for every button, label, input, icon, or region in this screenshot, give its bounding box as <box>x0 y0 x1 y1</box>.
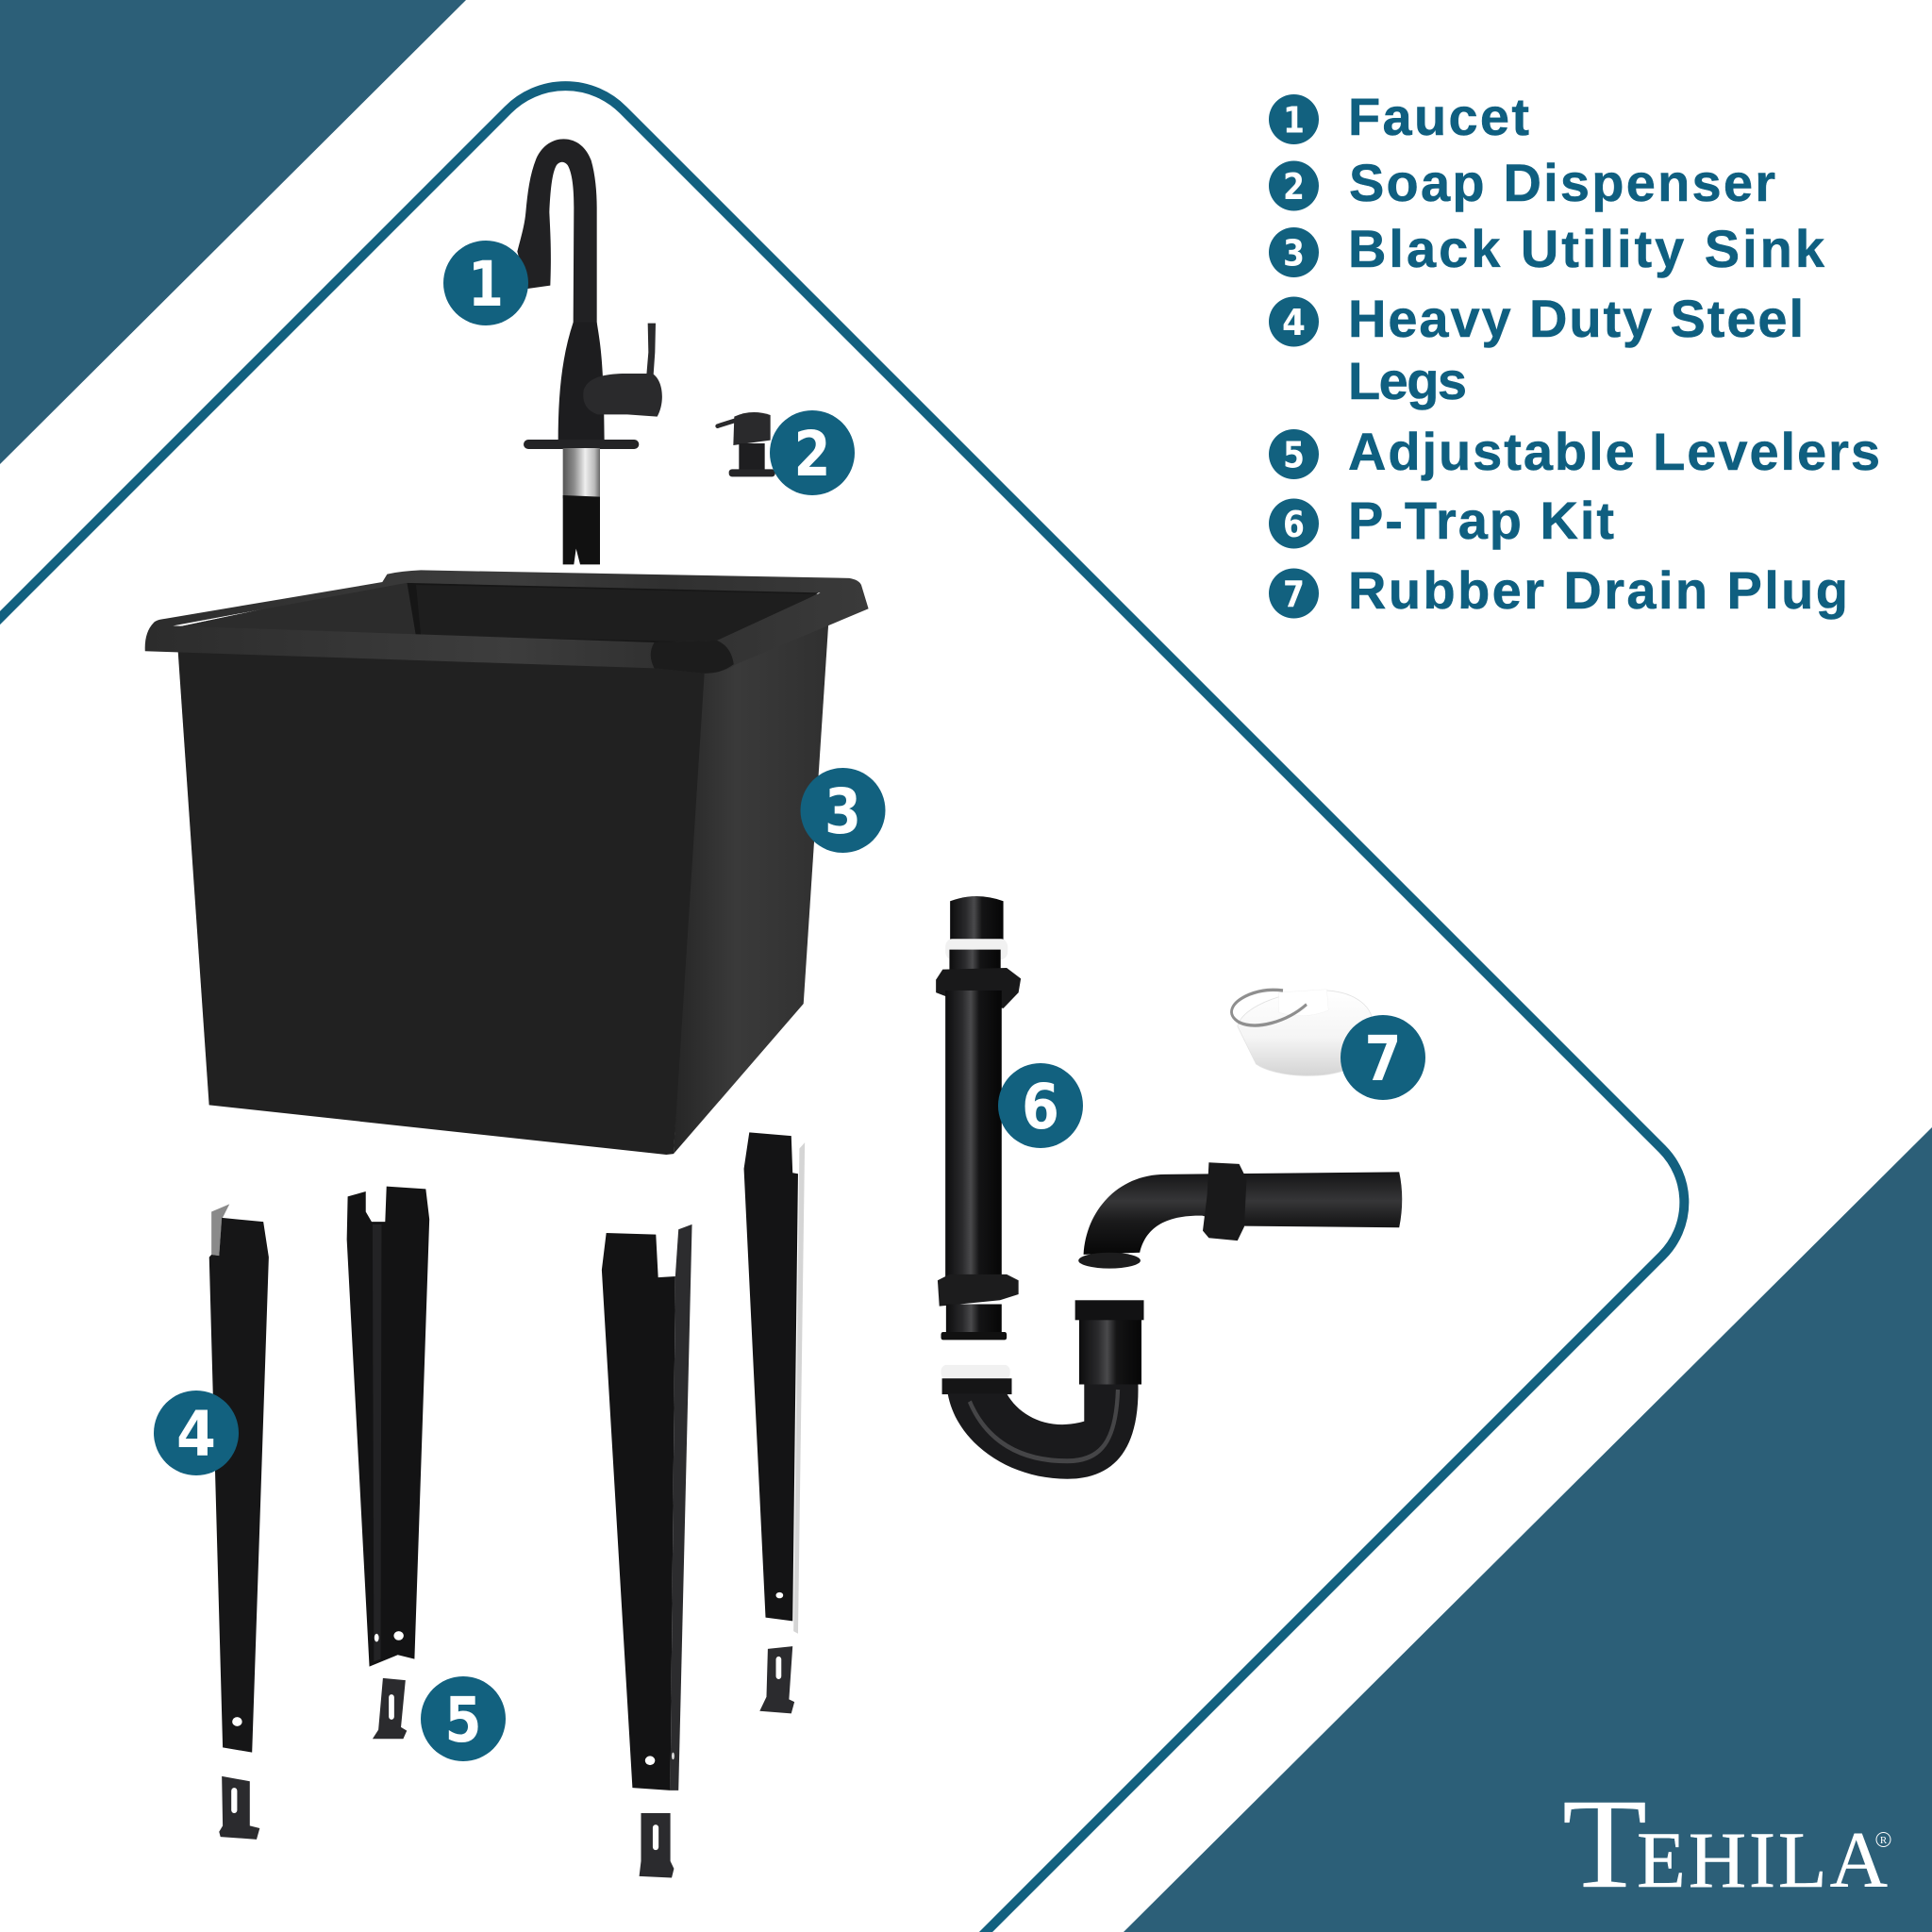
leg 1 <box>209 1204 269 1753</box>
legend item 4: 4 <box>1282 302 1306 343</box>
callout: number 2 <box>770 410 855 495</box>
legend item 3: 3 <box>1283 232 1305 274</box>
legend item 4: Legs <box>1348 351 1467 410</box>
logo: Tehila: T <box>1562 1774 1647 1915</box>
leveler 2 <box>373 1678 407 1739</box>
legend item 2: 2 <box>1283 166 1305 208</box>
legend item 1: 1 <box>1283 100 1305 142</box>
legend item 6: 6 <box>1283 504 1305 545</box>
callout: number 4: 4 <box>176 1398 216 1471</box>
logo: Tehila: EHILA <box>1637 1816 1888 1905</box>
legend list <box>1269 87 1880 620</box>
callout: number 3: 3 <box>824 775 861 848</box>
callout: number 7 <box>1341 1015 1425 1100</box>
callout: number 5: 5 <box>445 1684 481 1757</box>
callout: number 7: 7 <box>1364 1023 1402 1095</box>
icon: black utility sink <box>145 570 869 1155</box>
legend item 4 <box>1269 289 1804 410</box>
legend item 5: Adjustable Levelers <box>1348 422 1880 481</box>
leveler 4 <box>759 1646 794 1713</box>
background triangle: bottom right <box>1124 1127 1932 1932</box>
logo: Tehila: R <box>1880 1835 1888 1846</box>
icon: rubber drain plug <box>1231 990 1373 1075</box>
icon: faucet <box>517 139 662 564</box>
callout: number 3 <box>800 768 885 853</box>
sink front wall <box>177 648 705 1155</box>
legend item 7: 7 <box>1283 574 1305 615</box>
sink side wall <box>674 623 828 1154</box>
elbow tube <box>1078 1162 1402 1269</box>
sink interior <box>161 579 825 648</box>
leveler 3 <box>640 1813 674 1878</box>
legend item 6: P-Trap Kit <box>1348 491 1614 550</box>
callout: number 6: 6 <box>1022 1071 1059 1143</box>
legend item 4: Heavy Duty Steel <box>1348 289 1804 348</box>
callout: number 1: 1 <box>468 248 504 321</box>
U-bend <box>941 1300 1143 1479</box>
icon: soap dispenser <box>718 412 775 476</box>
legend item 7: Rubber Drain Plug <box>1348 560 1848 620</box>
legend item 2: Soap Dispenser <box>1349 153 1775 212</box>
legend item 1 <box>1269 87 1529 146</box>
logo: Tehila <box>1562 1774 1890 1915</box>
callout: number 4 <box>154 1391 239 1475</box>
leg 2 <box>347 1187 429 1667</box>
vertical tailpiece <box>936 896 1021 1340</box>
legend item 3: Black Utility Sink <box>1348 219 1825 278</box>
callout: number 1 <box>443 241 528 325</box>
rim front corner <box>651 641 734 674</box>
icon: P-trap kit <box>936 896 1402 1479</box>
callout: number 5 <box>421 1676 506 1761</box>
legend item 1: Faucet <box>1348 87 1529 146</box>
background triangle: top left <box>0 0 466 464</box>
leg 3 <box>602 1224 692 1790</box>
leveler 1 <box>219 1776 259 1840</box>
icon: adjustable levelers <box>219 1646 794 1878</box>
icon: steel legs <box>209 1132 805 1790</box>
leg 4 <box>744 1132 805 1634</box>
sink rim <box>145 570 869 674</box>
callout: number 6 <box>998 1063 1083 1148</box>
legend item 5: 5 <box>1283 434 1305 475</box>
callout: number 2: 2 <box>794 418 830 491</box>
